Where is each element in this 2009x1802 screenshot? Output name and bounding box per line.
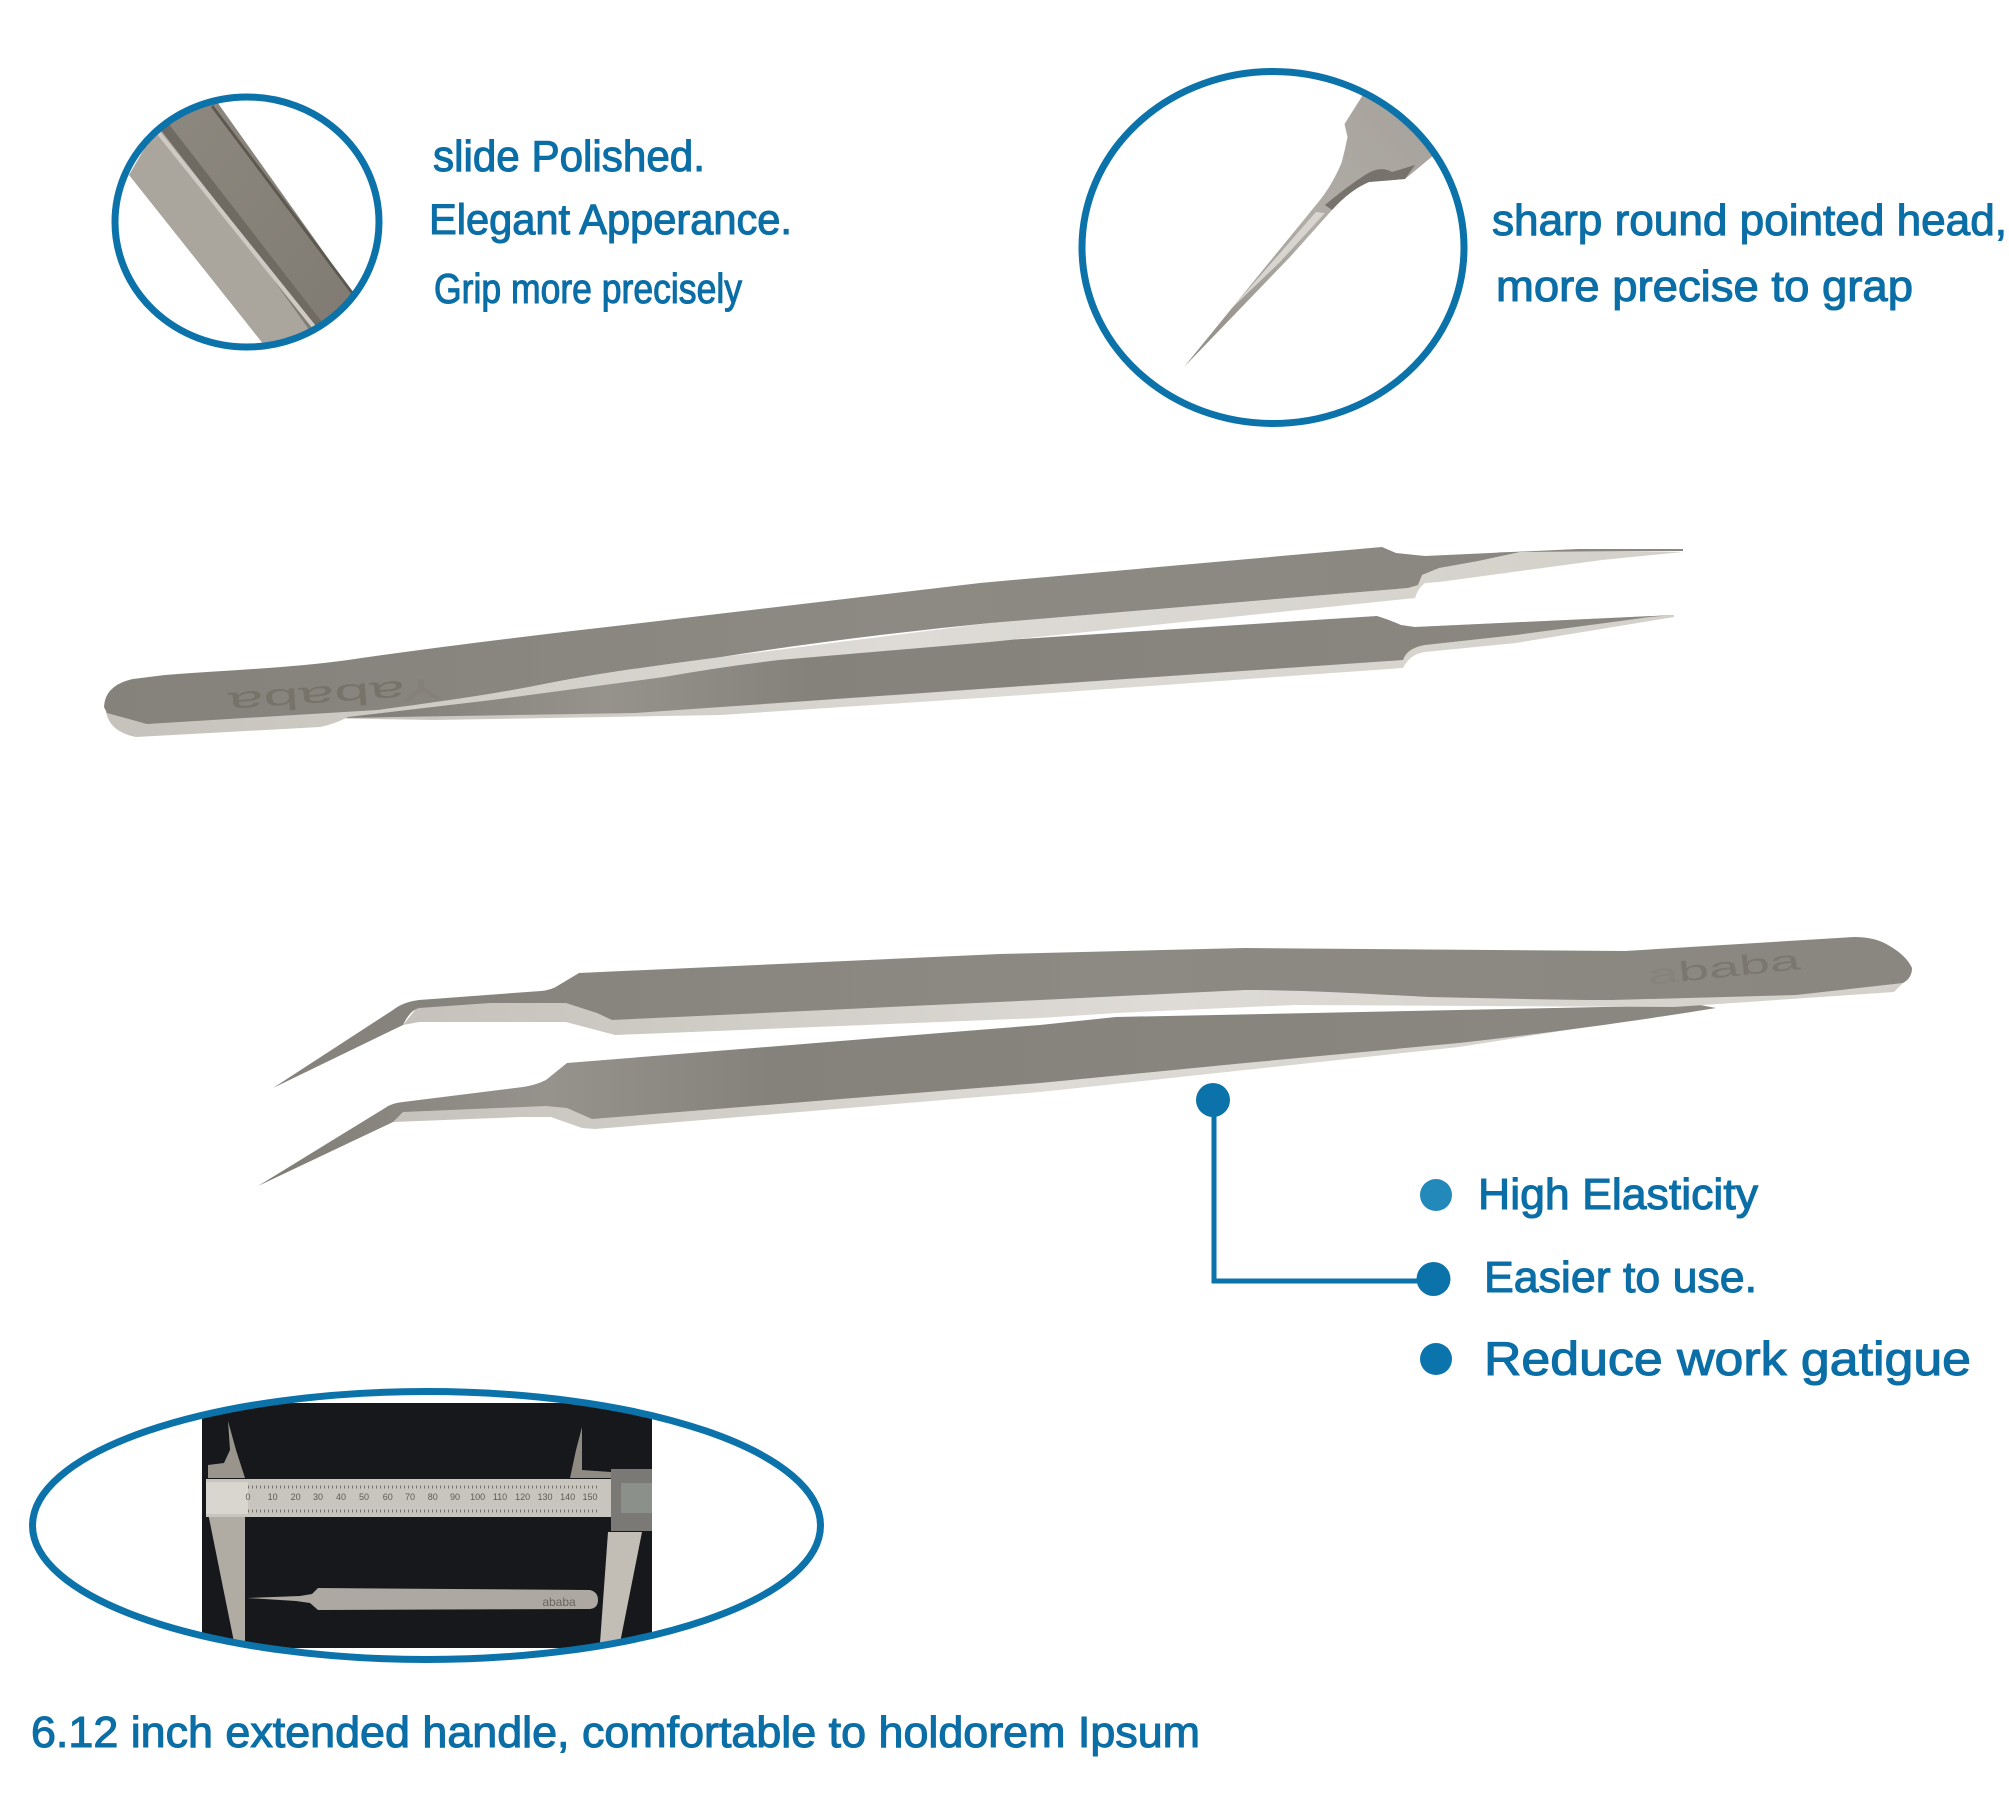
curved tweezers: [258, 937, 1912, 1186]
bullet list: benefits: [1420, 1170, 1971, 1385]
caliper rule: [206, 1479, 612, 1517]
ruler scale: 130: [537, 1492, 553, 1502]
caliper digital head: [611, 1469, 652, 1531]
text: polished features: Elegant Apperance.: [429, 196, 792, 244]
text: polished features: slide Polished.: [433, 132, 705, 181]
engraved brand: Yababa: [226, 671, 444, 719]
callout: sharp tip magnified circle: [1082, 72, 1464, 424]
ruler scale: 40: [336, 1492, 346, 1502]
ruler scale: 140: [560, 1492, 575, 1502]
ruler scale: 0: [245, 1492, 251, 1502]
callout: caliper measurement photo: [32, 1392, 820, 1660]
upper arm: [273, 937, 1912, 1088]
ruler scale: [246, 1494, 598, 1500]
ruler scale: 10: [268, 1492, 278, 1502]
miniature tweezers: [247, 1588, 598, 1610]
upper arm: [104, 547, 1683, 737]
bullet list: benefits: Easier to use.: [1484, 1253, 1757, 1302]
callout: caliper measurement photo: ababa: [542, 1595, 576, 1609]
bullet list: benefits: High Elasticity: [1478, 1170, 1758, 1219]
text: polished features: [429, 132, 792, 312]
ruler scale: 100: [470, 1492, 485, 1502]
ruler scale: 120: [515, 1492, 530, 1502]
text: sharp head description: more precise to grap: [1496, 262, 1913, 311]
ruler scale: 80: [428, 1492, 438, 1502]
bullet: reduce work: [1420, 1343, 1452, 1375]
bullet list: benefits: Reduce work gatigue: [1484, 1332, 1971, 1385]
ruler scale: 50: [359, 1492, 369, 1502]
engraved brand: a baba: [1646, 944, 1803, 991]
callout: polished surface magnified circle: [115, 85, 379, 360]
ruler scale: 150: [582, 1492, 598, 1502]
caliper jaws: [208, 1421, 245, 1478]
ruler scale: 70: [405, 1492, 415, 1502]
text: sharp head description: [1492, 196, 2007, 311]
caption: handle length: 6.12 inch extended handle, comfortable to holdorem Ipsum: [31, 1708, 1200, 1757]
ruler scale: 30: [313, 1492, 323, 1502]
ruler scale: 20: [291, 1492, 301, 1502]
text: polished features: Grip more precisely: [434, 265, 742, 312]
ruler scale: 60: [383, 1492, 393, 1502]
text: sharp head description: sharp round pointed head,: [1492, 196, 2007, 245]
callout connector line: [1196, 1083, 1450, 1296]
ruler scale: 90: [450, 1492, 460, 1502]
ruler scale: 110: [493, 1492, 507, 1502]
lower arm: [258, 1005, 1716, 1186]
bullet: high elasticity: [1420, 1179, 1452, 1211]
straight tweezers: [104, 547, 1683, 737]
lower arm: [320, 615, 1674, 720]
